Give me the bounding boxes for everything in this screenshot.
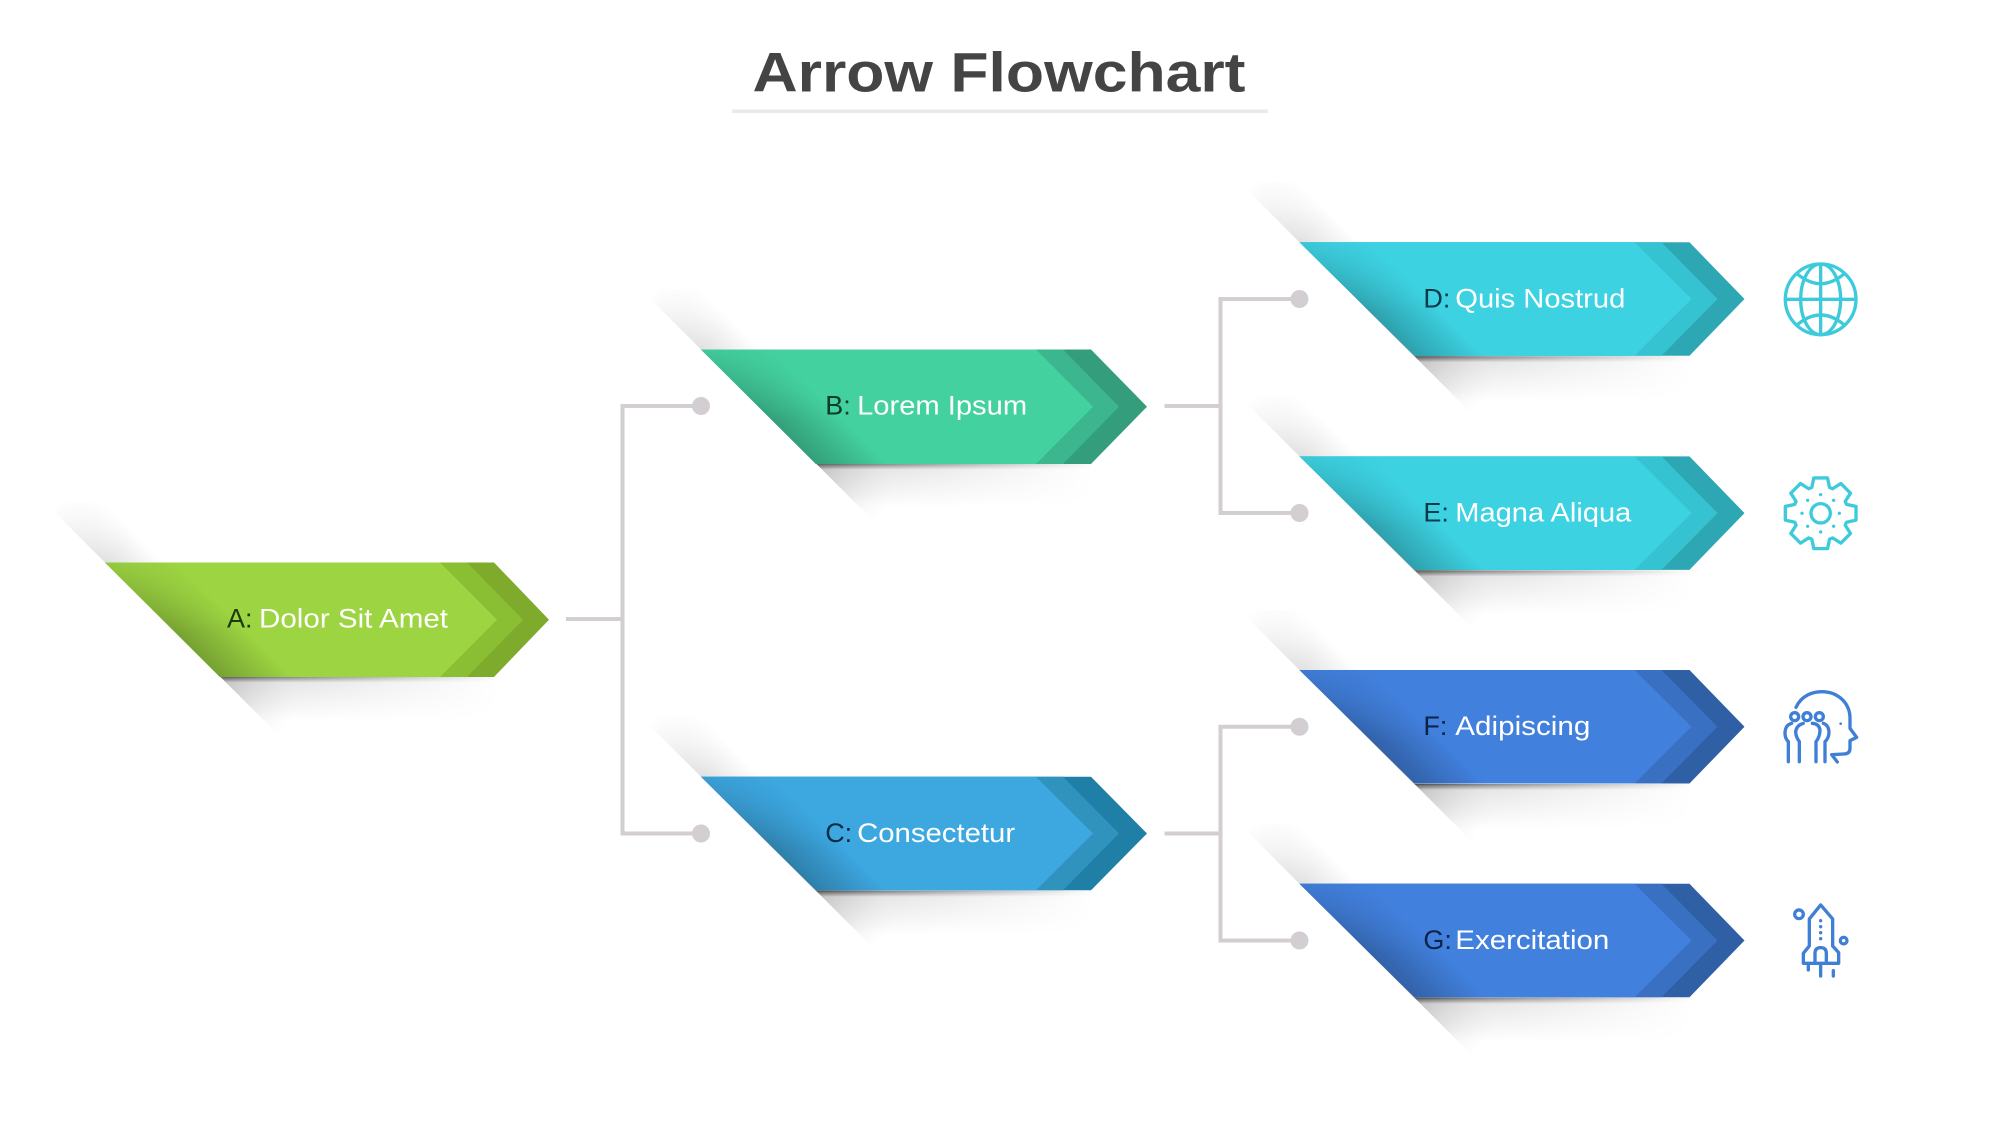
arrow F: Adipiscing: [1240, 610, 1744, 844]
icon: globe: [1785, 264, 1856, 335]
arrow A: Dolor Sit Amet: [45, 502, 549, 736]
arrow F: Adipiscing: F:: [1423, 711, 1447, 741]
icon: head with people: [1785, 692, 1857, 762]
arrow B: Lorem Ipsum: [641, 290, 1147, 524]
arrow G: Exercitation: [1240, 824, 1744, 1058]
arrow B: Lorem Ipsum: Lorem Ipsum: [857, 390, 1027, 420]
arrow G: Exercitation: Exercitation: [1455, 925, 1609, 955]
connector: C to F and G: [1164, 718, 1308, 950]
icon: gear: [1785, 478, 1856, 549]
arrow G: Exercitation: G:: [1423, 925, 1452, 955]
arrow B: Lorem Ipsum: B:: [825, 390, 851, 420]
arrow A: Dolor Sit Amet: A:: [227, 604, 253, 634]
connector: B to D and E: [1164, 290, 1308, 522]
arrow C: Consectetur: C:: [825, 818, 852, 848]
arrow E: Magna Aliqua: E:: [1423, 497, 1449, 527]
arrow D: Quis Nostrud: Quis Nostrud: [1455, 283, 1625, 313]
connector: A to B and C: [566, 397, 710, 842]
arrow A: Dolor Sit Amet: Dolor Sit Amet: [259, 604, 449, 634]
arrow D: Quis Nostrud: [1240, 182, 1744, 416]
arrow C: Consectetur: [641, 717, 1147, 951]
title: Arrow Flowchart: [752, 40, 1246, 104]
arrow E: Magna Aliqua: Magna Aliqua: [1455, 497, 1632, 527]
icon: rocket: [1795, 905, 1847, 976]
arrow E: Magna Aliqua: [1240, 396, 1744, 630]
arrow C: Consectetur: Consectetur: [857, 818, 1015, 848]
arrow F: Adipiscing: Adipiscing: [1455, 711, 1590, 741]
arrow D: Quis Nostrud: D:: [1423, 283, 1450, 313]
